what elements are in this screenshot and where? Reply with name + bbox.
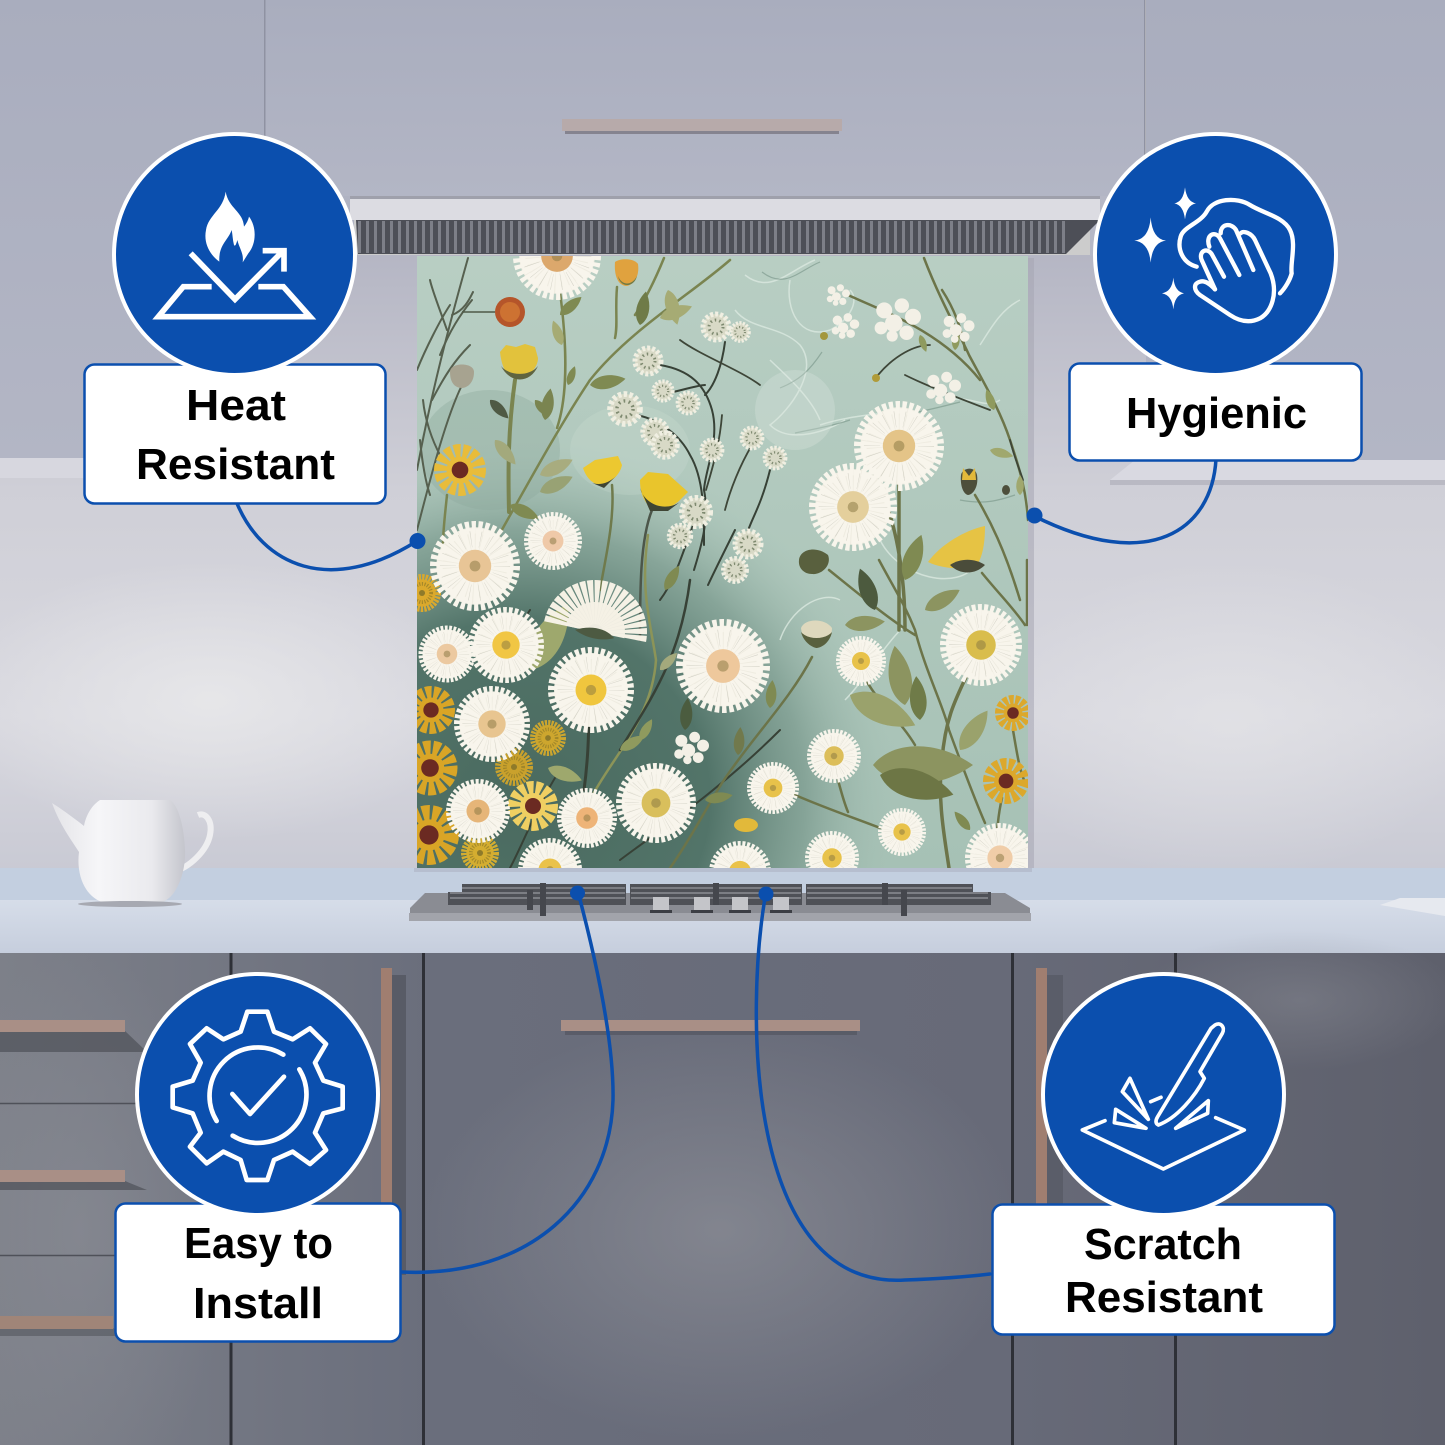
- drawer handles: [0, 1020, 147, 1336]
- label: scratch resistant: Resistant: [1065, 1273, 1263, 1322]
- dark twigs left: [417, 258, 473, 530]
- yellow tulip flowers: [500, 344, 985, 572]
- label: heat resistant: Heat: [186, 381, 286, 430]
- panel: floral splashback artwork: [417, 256, 1028, 868]
- wall: [0, 255, 1445, 870]
- label: heat resistant: [84, 364, 386, 504]
- icon badge: scratch resistant: [1043, 974, 1284, 1215]
- extractor hood: [350, 196, 1100, 254]
- right stems: [670, 258, 1028, 868]
- sunflowers: [406, 452, 1025, 869]
- connector: scratch resistant: [756, 892, 990, 1280]
- countertop: [0, 868, 1445, 953]
- label: hygienic: Hygienic: [1126, 389, 1307, 438]
- door handles: [381, 968, 1063, 1275]
- connector: heat resistant: [236, 501, 417, 570]
- upper cabinets: [0, 0, 1445, 485]
- label: scratch resistant: Scratch: [1084, 1220, 1242, 1269]
- fan daisy: [564, 596, 631, 645]
- icon badge: easy to install: [137, 974, 378, 1215]
- umbel clusters: [610, 284, 974, 764]
- olive main stems left: [443, 258, 730, 800]
- dark curved branches: [500, 342, 780, 868]
- daisies: [422, 218, 1030, 899]
- connector lines: [236, 459, 1216, 1280]
- label: easy to install: [116, 1204, 400, 1342]
- stems: [417, 258, 1028, 868]
- lower cabinets: [0, 930, 1445, 1445]
- label: easy to install: Install: [193, 1279, 323, 1328]
- icon badge: hygienic: [1095, 134, 1336, 375]
- panel shadow: [1028, 258, 1034, 870]
- connector dots: [410, 508, 1042, 902]
- connector: hygienic: [1034, 459, 1216, 543]
- teapot: [52, 800, 211, 907]
- artwork background: [417, 256, 1028, 868]
- label: scratch resistant: [992, 1204, 1334, 1334]
- cabinet handle: [562, 119, 842, 134]
- leaves: [487, 288, 1024, 833]
- label: heat resistant: Resistant: [136, 440, 335, 489]
- icon badge: heat resistant: [114, 134, 355, 375]
- gas hob: [409, 883, 1031, 921]
- label: easy to install: Easy to: [184, 1219, 333, 1268]
- round orange bud: [462, 297, 525, 327]
- small buds: [450, 259, 1010, 832]
- label: hygienic: [1070, 364, 1362, 460]
- connector: easy to install: [402, 892, 613, 1272]
